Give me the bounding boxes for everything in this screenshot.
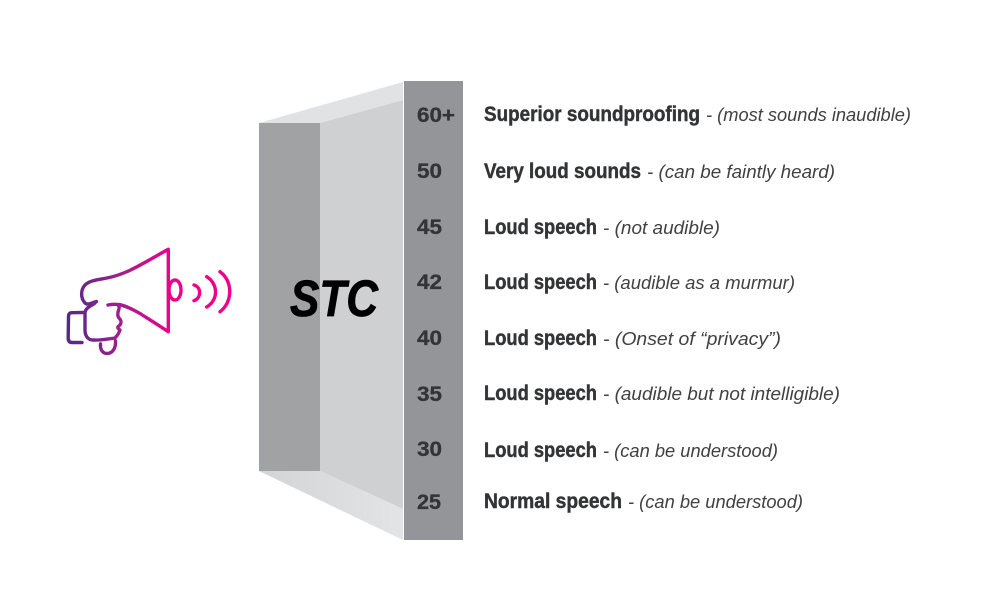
rating 30: - (can be understood) xyxy=(603,440,778,461)
rating 50: 50 xyxy=(417,160,442,183)
rating 42: 42 xyxy=(417,271,442,294)
rating 30: Loud speech xyxy=(484,439,597,462)
rating 42: - (audible as a murmur) xyxy=(603,272,795,293)
rating 30: 30 xyxy=(417,438,442,461)
icon: megaphone xyxy=(68,249,181,354)
rating 40: Loud speech xyxy=(484,327,597,350)
rating 60+ xyxy=(417,103,911,127)
rating 35 xyxy=(417,382,840,406)
rating 35: Loud speech xyxy=(484,382,597,405)
rating 30 xyxy=(417,438,778,462)
rating 40: 40 xyxy=(417,327,442,350)
rating 45: - (not audible) xyxy=(603,217,720,238)
rating 35: - (audible but not intelligible) xyxy=(603,383,840,404)
rating 50: - (can be faintly heard) xyxy=(647,161,835,182)
wall: 3D block xyxy=(259,82,403,540)
rating 60+: - (most sounds inaudible) xyxy=(706,104,911,125)
rating 40: - (Onset of “privacy”) xyxy=(603,328,781,349)
rating 45 xyxy=(417,216,720,239)
rating 25 xyxy=(417,490,803,514)
rating 45: 45 xyxy=(417,216,442,239)
rating 35: 35 xyxy=(417,383,442,406)
rating 42: Loud speech xyxy=(484,271,597,294)
icon: sound waves xyxy=(194,272,230,312)
rating 25: 25 xyxy=(417,491,441,514)
rating 60+: 60+ xyxy=(417,104,455,127)
rating 50 xyxy=(417,160,835,183)
rating 25: - (can be understood) xyxy=(628,491,803,512)
rating 25: Normal speech xyxy=(484,490,622,513)
rating 50: Very loud sounds xyxy=(484,160,641,183)
rating 60+: Superior soundproofing xyxy=(484,103,700,126)
STC label: STC xyxy=(290,270,379,327)
rating 40 xyxy=(417,327,781,350)
STC scale column xyxy=(404,81,463,540)
rating 45: Loud speech xyxy=(484,216,597,239)
rating 42 xyxy=(417,271,795,294)
